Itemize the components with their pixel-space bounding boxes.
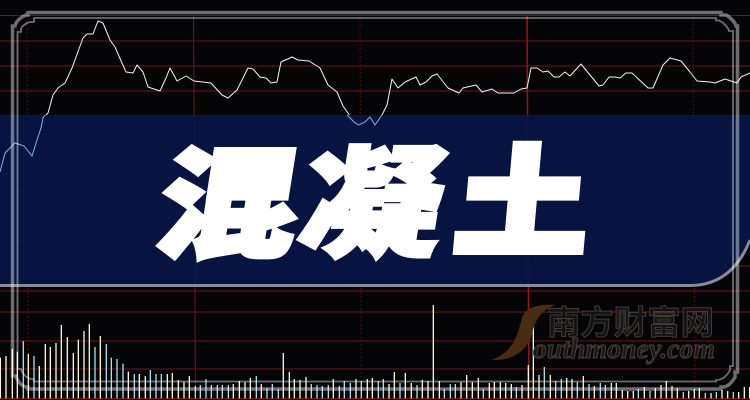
watermark: southmoney logo [492, 304, 715, 365]
volume bars [0, 305, 750, 398]
watermark swoosh [492, 305, 556, 360]
line chart: segments seen through the band [0, 115, 382, 172]
watermark chinese name: 南方财富网 [547, 304, 714, 341]
banner bottom edge [0, 240, 750, 286]
line chart: price trend [0, 21, 750, 172]
banner: navy title band [0, 115, 750, 286]
title glyph 3: 土 [450, 138, 594, 270]
title glyph 1: 混 [149, 141, 308, 273]
volume bars: left half [0, 324, 372, 398]
title [149, 138, 594, 273]
title glyph 2: 凝 [291, 139, 453, 272]
volume bars: right half [378, 305, 750, 398]
watermark latin name: outhmoney.com [533, 333, 715, 365]
